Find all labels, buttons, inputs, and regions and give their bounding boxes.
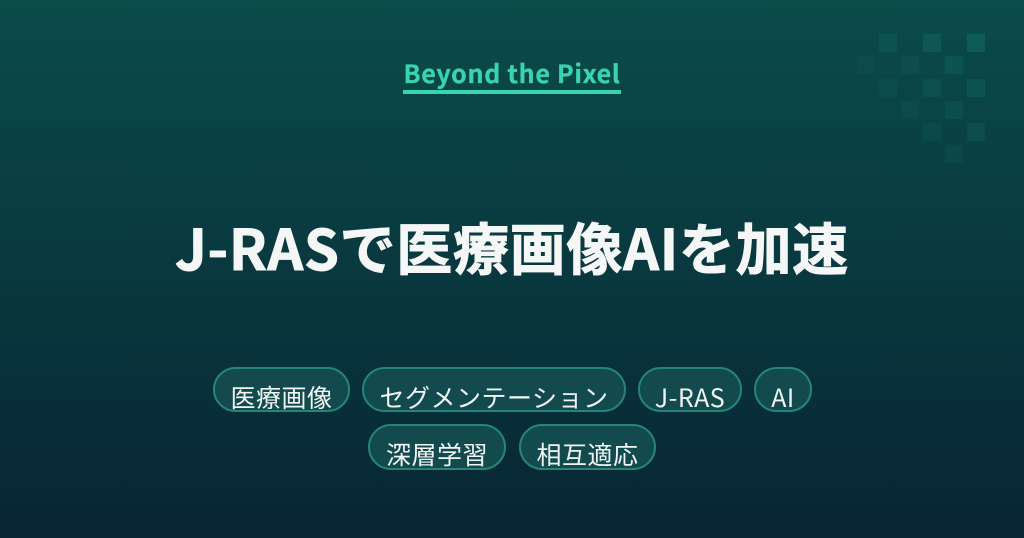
tag: AI: AI — [771, 379, 795, 415]
tag: 深層学習: 深層学習 — [386, 436, 488, 472]
title: J-RASで医療画像AIを加速 — [175, 206, 849, 287]
tag: J-RAS: J-RAS — [655, 379, 725, 415]
tag: 深層学習 — [368, 424, 506, 470]
tag: セグメンテーション — [362, 367, 626, 412]
tag: 医療画像 — [213, 367, 350, 412]
tags — [213, 367, 812, 472]
tag: AI — [754, 367, 812, 412]
tag: J-RAS — [638, 367, 742, 412]
decorative pixel pattern icon — [879, 34, 985, 141]
tag: 医療画像: 医療画像 — [230, 379, 332, 415]
brand heading: Beyond the Pixel: Beyond the Pixel — [403, 55, 620, 91]
tag: セグメンテーション: セグメンテーション — [379, 379, 608, 415]
tag: 相互適応: 相互適応 — [536, 436, 638, 472]
tag: 相互適応 — [519, 424, 656, 470]
